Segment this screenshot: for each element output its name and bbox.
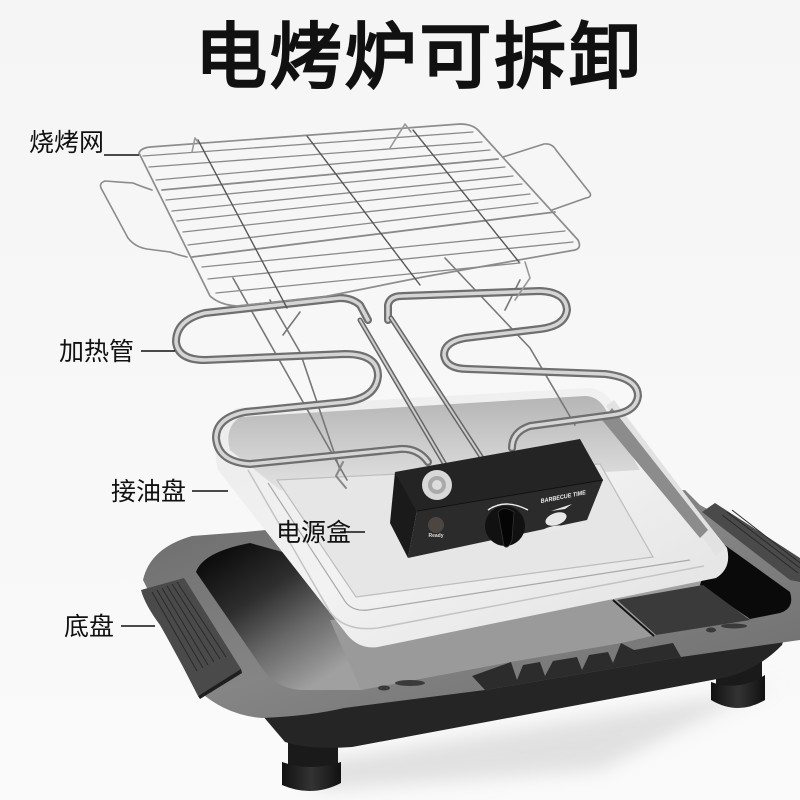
cross wires [143, 132, 573, 293]
right handle [702, 503, 800, 582]
label: grill rack [29, 129, 139, 157]
support rods [233, 258, 575, 480]
label: power box: 电源盒 [276, 519, 351, 547]
right handle [503, 144, 590, 210]
dial [485, 504, 528, 547]
tray outer [215, 388, 728, 647]
label: base [64, 613, 155, 641]
label: drip tray [111, 478, 228, 506]
base floor centre [330, 600, 656, 690]
power lamp: Ready [428, 533, 444, 539]
heating tube [176, 258, 638, 488]
base notch [472, 643, 681, 690]
box top [395, 439, 603, 512]
foot: left [282, 735, 341, 791]
label: grill rack: 烧烤网 [29, 129, 104, 157]
base inner black wall right [700, 538, 791, 619]
label: drip tray: 接油盘 [111, 478, 186, 506]
box side [390, 472, 417, 558]
base rim [143, 490, 800, 718]
base interior [196, 540, 791, 690]
hooks [336, 462, 346, 488]
left coil [176, 298, 428, 464]
base step panel [617, 585, 750, 635]
tray right wall highlight [606, 400, 726, 556]
brand text: BARBECUE TIME [540, 490, 587, 505]
label: base: 底盘 [64, 613, 114, 641]
tray inner wall [228, 396, 640, 490]
left handle [100, 181, 187, 257]
foot: right [711, 660, 765, 708]
grill rack [100, 124, 590, 308]
rack hooks [192, 124, 530, 300]
badge [422, 470, 452, 500]
left handle [141, 578, 242, 699]
tray floor [277, 464, 653, 597]
straight leads [360, 318, 482, 468]
label: heating tube [59, 338, 175, 366]
slots [378, 624, 747, 690]
drip tray [215, 388, 728, 647]
tray right wall shadow [602, 408, 708, 538]
label: heating tube: 加热管 [59, 338, 134, 366]
title: 电烤炉可拆卸 [195, 18, 641, 98]
box front [408, 480, 603, 558]
food icons [542, 504, 572, 534]
base body [262, 620, 790, 748]
power box [390, 439, 603, 558]
right coil [388, 291, 638, 448]
long rods [198, 130, 519, 308]
rack frame [139, 124, 579, 306]
base tray [141, 490, 800, 791]
power lamp [428, 517, 444, 539]
